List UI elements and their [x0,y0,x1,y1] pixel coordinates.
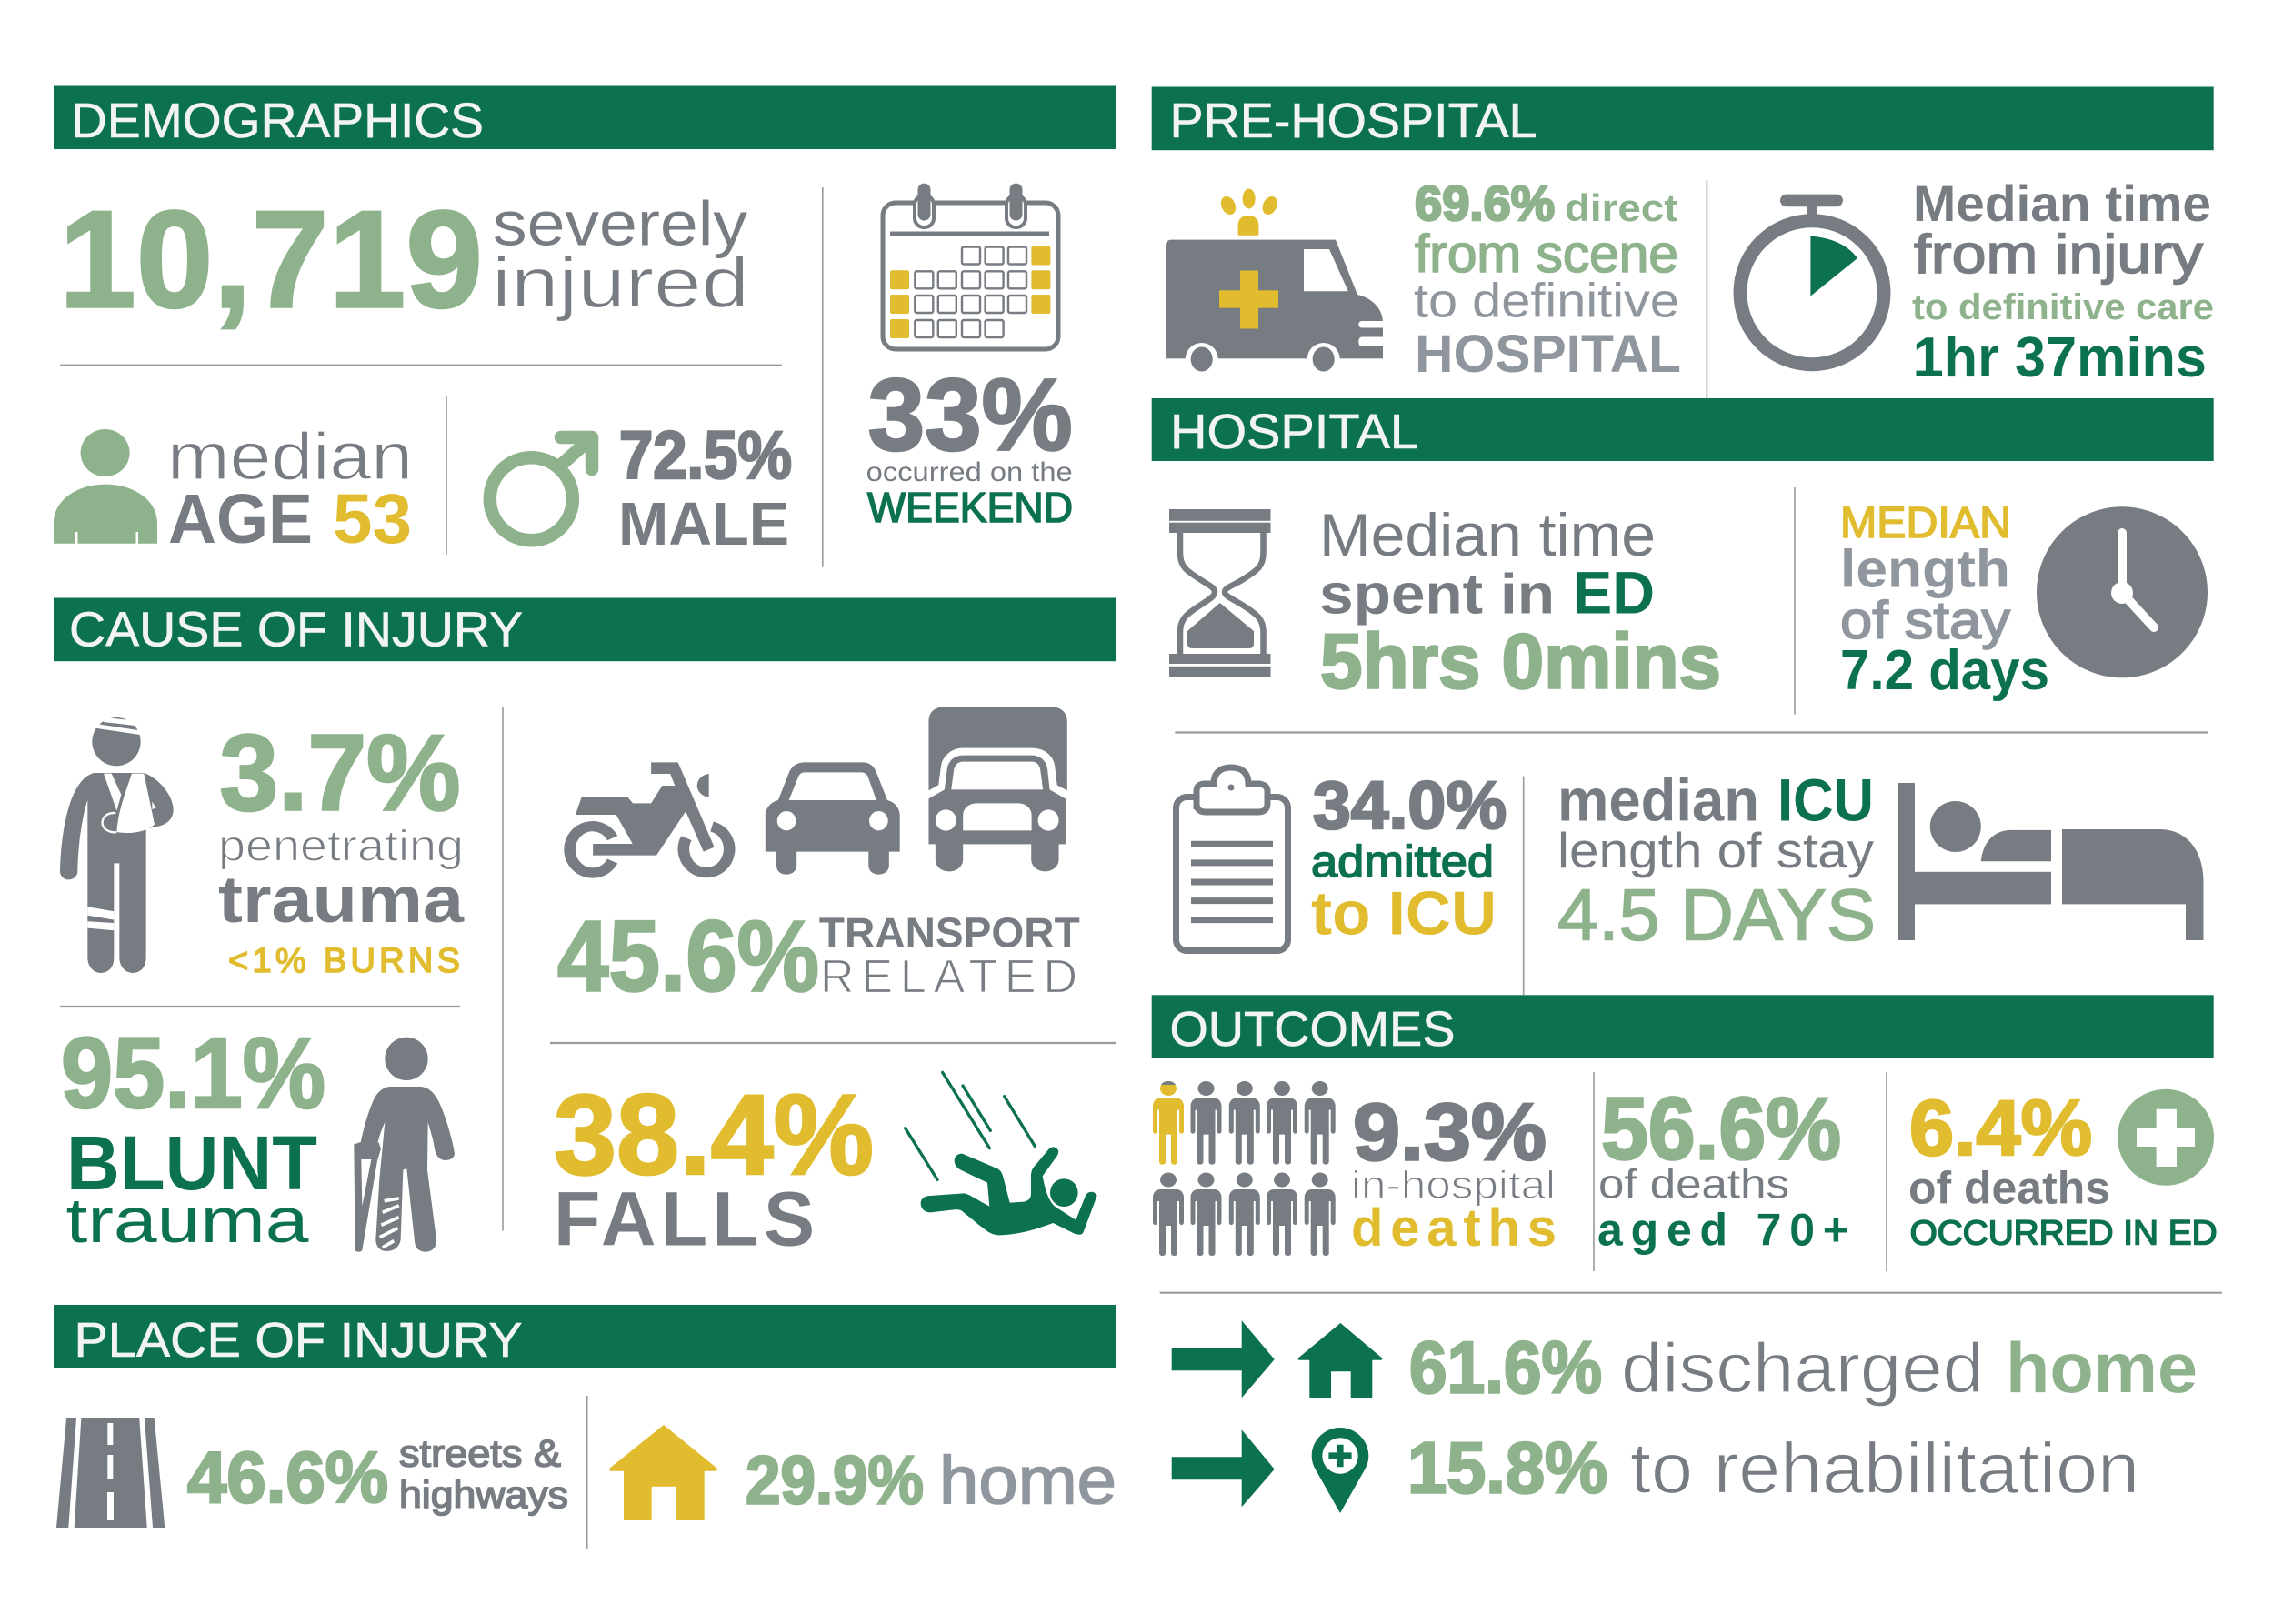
stat: 29.9% home [746,1441,1116,1518]
stat: median ICU length of stay 4.5 days [1557,767,1876,955]
icon: clipboard [1177,767,1287,951]
stat: 3.7% penetrating trauma: penetrating [218,822,464,870]
stat: 3.7% penetrating trauma: trauma [218,864,465,937]
stat: median length of stay 7.2 days [1840,499,2049,702]
stat: median time from injury to definitive care: from injury [1914,224,2203,285]
icon: medical cross circle [2118,1089,2214,1186]
stat: 3.7% penetrating trauma: 3.7% [220,713,460,834]
stat: median ICU length of stay 4.5 days: median [1557,767,1759,834]
stat: 56.6% of deaths aged 70+: 56.6% [1601,1078,1841,1178]
stat: median ICU length of stay 4.5 days: length of stay [1557,822,1875,878]
heading: cause of injury [54,598,1116,661]
icon: calendar [883,184,1058,349]
heading: demographics [54,85,1116,149]
heading: hospital [1152,398,2214,461]
stat: median length of stay 7.2 days: MEDIAN [1840,499,2011,547]
stat: 15.8% to rehabilitation: to rehabilitation [1630,1428,2139,1509]
stat: 33% occurred on the weekend: WEEKEND [867,484,1073,531]
stat: 3.7% penetrating trauma [218,713,465,980]
icon: person with crutch and leg cast [354,1038,455,1252]
stat: 69.6% direct from scene to definitive hospital: to definitive [1414,274,1679,327]
stat: 38.4% falls: 38.4% [554,1072,874,1198]
stat: 95.1% blunt trauma [61,1018,325,1256]
stat: median time spent in ED 5hrs 0mins [1319,501,1721,706]
icon: road [56,1418,165,1528]
stat: 33% occurred on the weekend: 33% [868,357,1073,471]
stat: median time from injury to definitive care: to definitive care [1912,287,2214,327]
stat: 46.6% streets and highways: streets & [399,1432,561,1475]
stat: 72.5% male: 72.5% [619,417,792,493]
stat: 61.6% discharged home: discharged [1621,1329,1984,1408]
stat: 10,719 severely injured: injured [492,242,749,322]
stat: 61.6% discharged home [1409,1328,2198,1409]
stat: 15.8% to rehabilitation: 15.8% [1407,1428,1607,1509]
icon: location pin with cross [1312,1428,1368,1513]
icon: car [766,762,900,875]
panel: demographics [54,85,1116,567]
stat: 46.6% streets and highways: 46.6% [187,1437,388,1518]
stat: median time from injury to definitive care: Median time [1913,175,2211,232]
stat: 10,719 severely injured: severely [493,189,748,259]
icon: person [54,429,157,544]
stat: 3.7% penetrating trauma: <1% BURNS [228,942,460,980]
stat: 45.6% transport related [557,900,1080,1012]
stat: median time spent in ED 5hrs 0mins: spent in [1319,564,1555,627]
icon: ten-person pictogram [1153,1081,1336,1256]
panel: place of injury [54,1305,1116,1549]
panel: outcomes [1152,995,2222,1513]
stat: 69.6% direct from scene to definitive hospital [1414,176,1681,384]
heading: outcomes: OUTCOMES [1169,1002,1455,1057]
icon: motorcycle [570,762,729,873]
stat: 15.8% to rehabilitation [1407,1428,2139,1509]
icon: male symbol [490,437,592,540]
icon: injured person with sling [60,717,174,973]
stat: 38.4% falls [554,1072,874,1262]
heading: place of injury: PLACE OF INJURY [75,1313,522,1368]
stat: 95.1% blunt trauma: 95.1% [61,1018,325,1129]
stat: 33% occurred on the weekend [866,357,1073,531]
icon: hourglass [1169,509,1271,677]
arrow: to rehabilitation [1172,1429,1275,1507]
icon: truck [928,707,1067,871]
stat: 69.6% direct from scene to definitive hospital: direct [1565,186,1678,229]
icon: ambulance [1155,189,1391,376]
heading: demographics: DEMOGRAPHICS [71,94,484,148]
stat: 9.3% in-hospital deaths: deaths [1351,1198,1557,1258]
icon: person in bed [1898,783,2204,940]
stat: 29.9% home: home [939,1442,1116,1518]
stat: median length of stay 7.2 days: of stay [1840,591,2010,650]
stat: 9.3% in-hospital deaths: in-hospital [1351,1163,1556,1207]
stat: 38.4% falls: FALLS [554,1177,815,1262]
stat: 6.4% of deaths occurred in ED [1908,1085,2218,1252]
stat: 34.0% admitted to ICU: to ICU [1311,879,1497,948]
stat: median time from injury to definitive care: 1hr 37mins [1913,326,2207,389]
stat: 33% occurred on the weekend: occurred on the [866,457,1073,487]
stat: 45.6% transport related: 45.6% [557,900,819,1012]
stat: 61.6% discharged home: 61.6% [1409,1328,1602,1409]
stat: median length of stay 7.2 days: length [1840,540,2010,598]
stat: 6.4% of deaths occurred in ED: of deaths [1908,1162,2110,1213]
stat: median ICU length of stay 4.5 days: 4.5 DAYS [1557,874,1876,955]
stat: median time spent in ED 5hrs 0mins: ED [1573,559,1655,627]
stat: median age 53 [167,420,413,558]
icon: green house [1297,1323,1383,1398]
stat: 56.6% of deaths aged 70+: aged 70+ [1597,1204,1849,1255]
icon: stopwatch [1740,195,1884,365]
stat: 10,719 severely injured: 10,719 [59,182,483,336]
stat: 72.5% male: MALE [618,490,789,558]
stat: 95.1% blunt trauma: trauma [65,1185,309,1256]
stat: 34.0% admitted to ICU [1311,767,1507,948]
stat: 45.6% transport related: TRANSPORT [819,908,1080,956]
stat: 46.6% streets and highways: highways [399,1473,568,1516]
heading: outcomes [1152,995,2214,1058]
heading: pre-hospital: PRE-HOSPITAL [1169,94,1537,148]
stat: 46.6% streets and highways [187,1432,568,1518]
stat: 34.0% admitted to ICU: 34.0% [1313,767,1507,843]
icon: clock [2037,506,2208,677]
stat: 69.6% direct from scene to definitive hospital: from scene [1415,225,1678,284]
stat: median length of stay 7.2 days: 7.2 days [1840,639,2049,702]
arrow: to discharged home [1172,1320,1275,1398]
stat: 56.6% of deaths aged 70+ [1597,1078,1849,1255]
stat: 69.6% direct from scene to definitive hospital: HOSPITAL [1415,325,1681,384]
stat: 61.6% discharged home: home [2006,1328,2198,1408]
stat: median time spent in ED 5hrs 0mins: Median time [1319,501,1656,568]
stat: median ICU length of stay 4.5 days: ICU [1777,767,1874,834]
panel: pre-hospital [1152,87,2214,398]
stat: median time from injury to definitive care [1912,175,2214,389]
stat: median age 53: AGE [168,480,313,558]
stat: 34.0% admitted to ICU: admitted [1311,837,1494,887]
panel: cause of injury [54,598,1116,1262]
stat: 45.6% transport related: RELATED [820,951,1077,1004]
heading: place of injury [54,1305,1116,1368]
stat: 9.3% in-hospital deaths [1351,1087,1557,1258]
stat: 69.6% direct from scene to definitive hospital: 69.6% [1415,176,1555,231]
icon: house [609,1425,717,1520]
stat: 10,719 severely injured [59,182,749,336]
stat: median age 53: median [167,420,413,494]
stat: 9.3% in-hospital deaths: 9.3% [1353,1087,1547,1178]
stat: 6.4% of deaths occurred in ED: 6.4% [1909,1085,2092,1172]
heading: pre-hospital [1152,87,2214,150]
stat: 56.6% of deaths aged 70+: of deaths [1598,1160,1789,1207]
heading: hospital: HOSPITAL [1170,405,1418,459]
icon: falling person [906,1072,1097,1235]
stat: median age 53: 53 [333,480,412,558]
panel: hospital [1152,398,2214,995]
stat: 6.4% of deaths occurred in ED: OCCURRED IN ED [1910,1214,2218,1252]
stat: 95.1% blunt trauma: BLUNT [66,1120,317,1206]
heading: cause of injury: CAUSE OF INJURY [69,602,523,657]
stat: 72.5% male [618,417,792,558]
stat: median time spent in ED 5hrs 0mins: 5hrs 0mins [1320,618,1721,706]
stat: 29.9% home: 29.9% [746,1441,924,1518]
